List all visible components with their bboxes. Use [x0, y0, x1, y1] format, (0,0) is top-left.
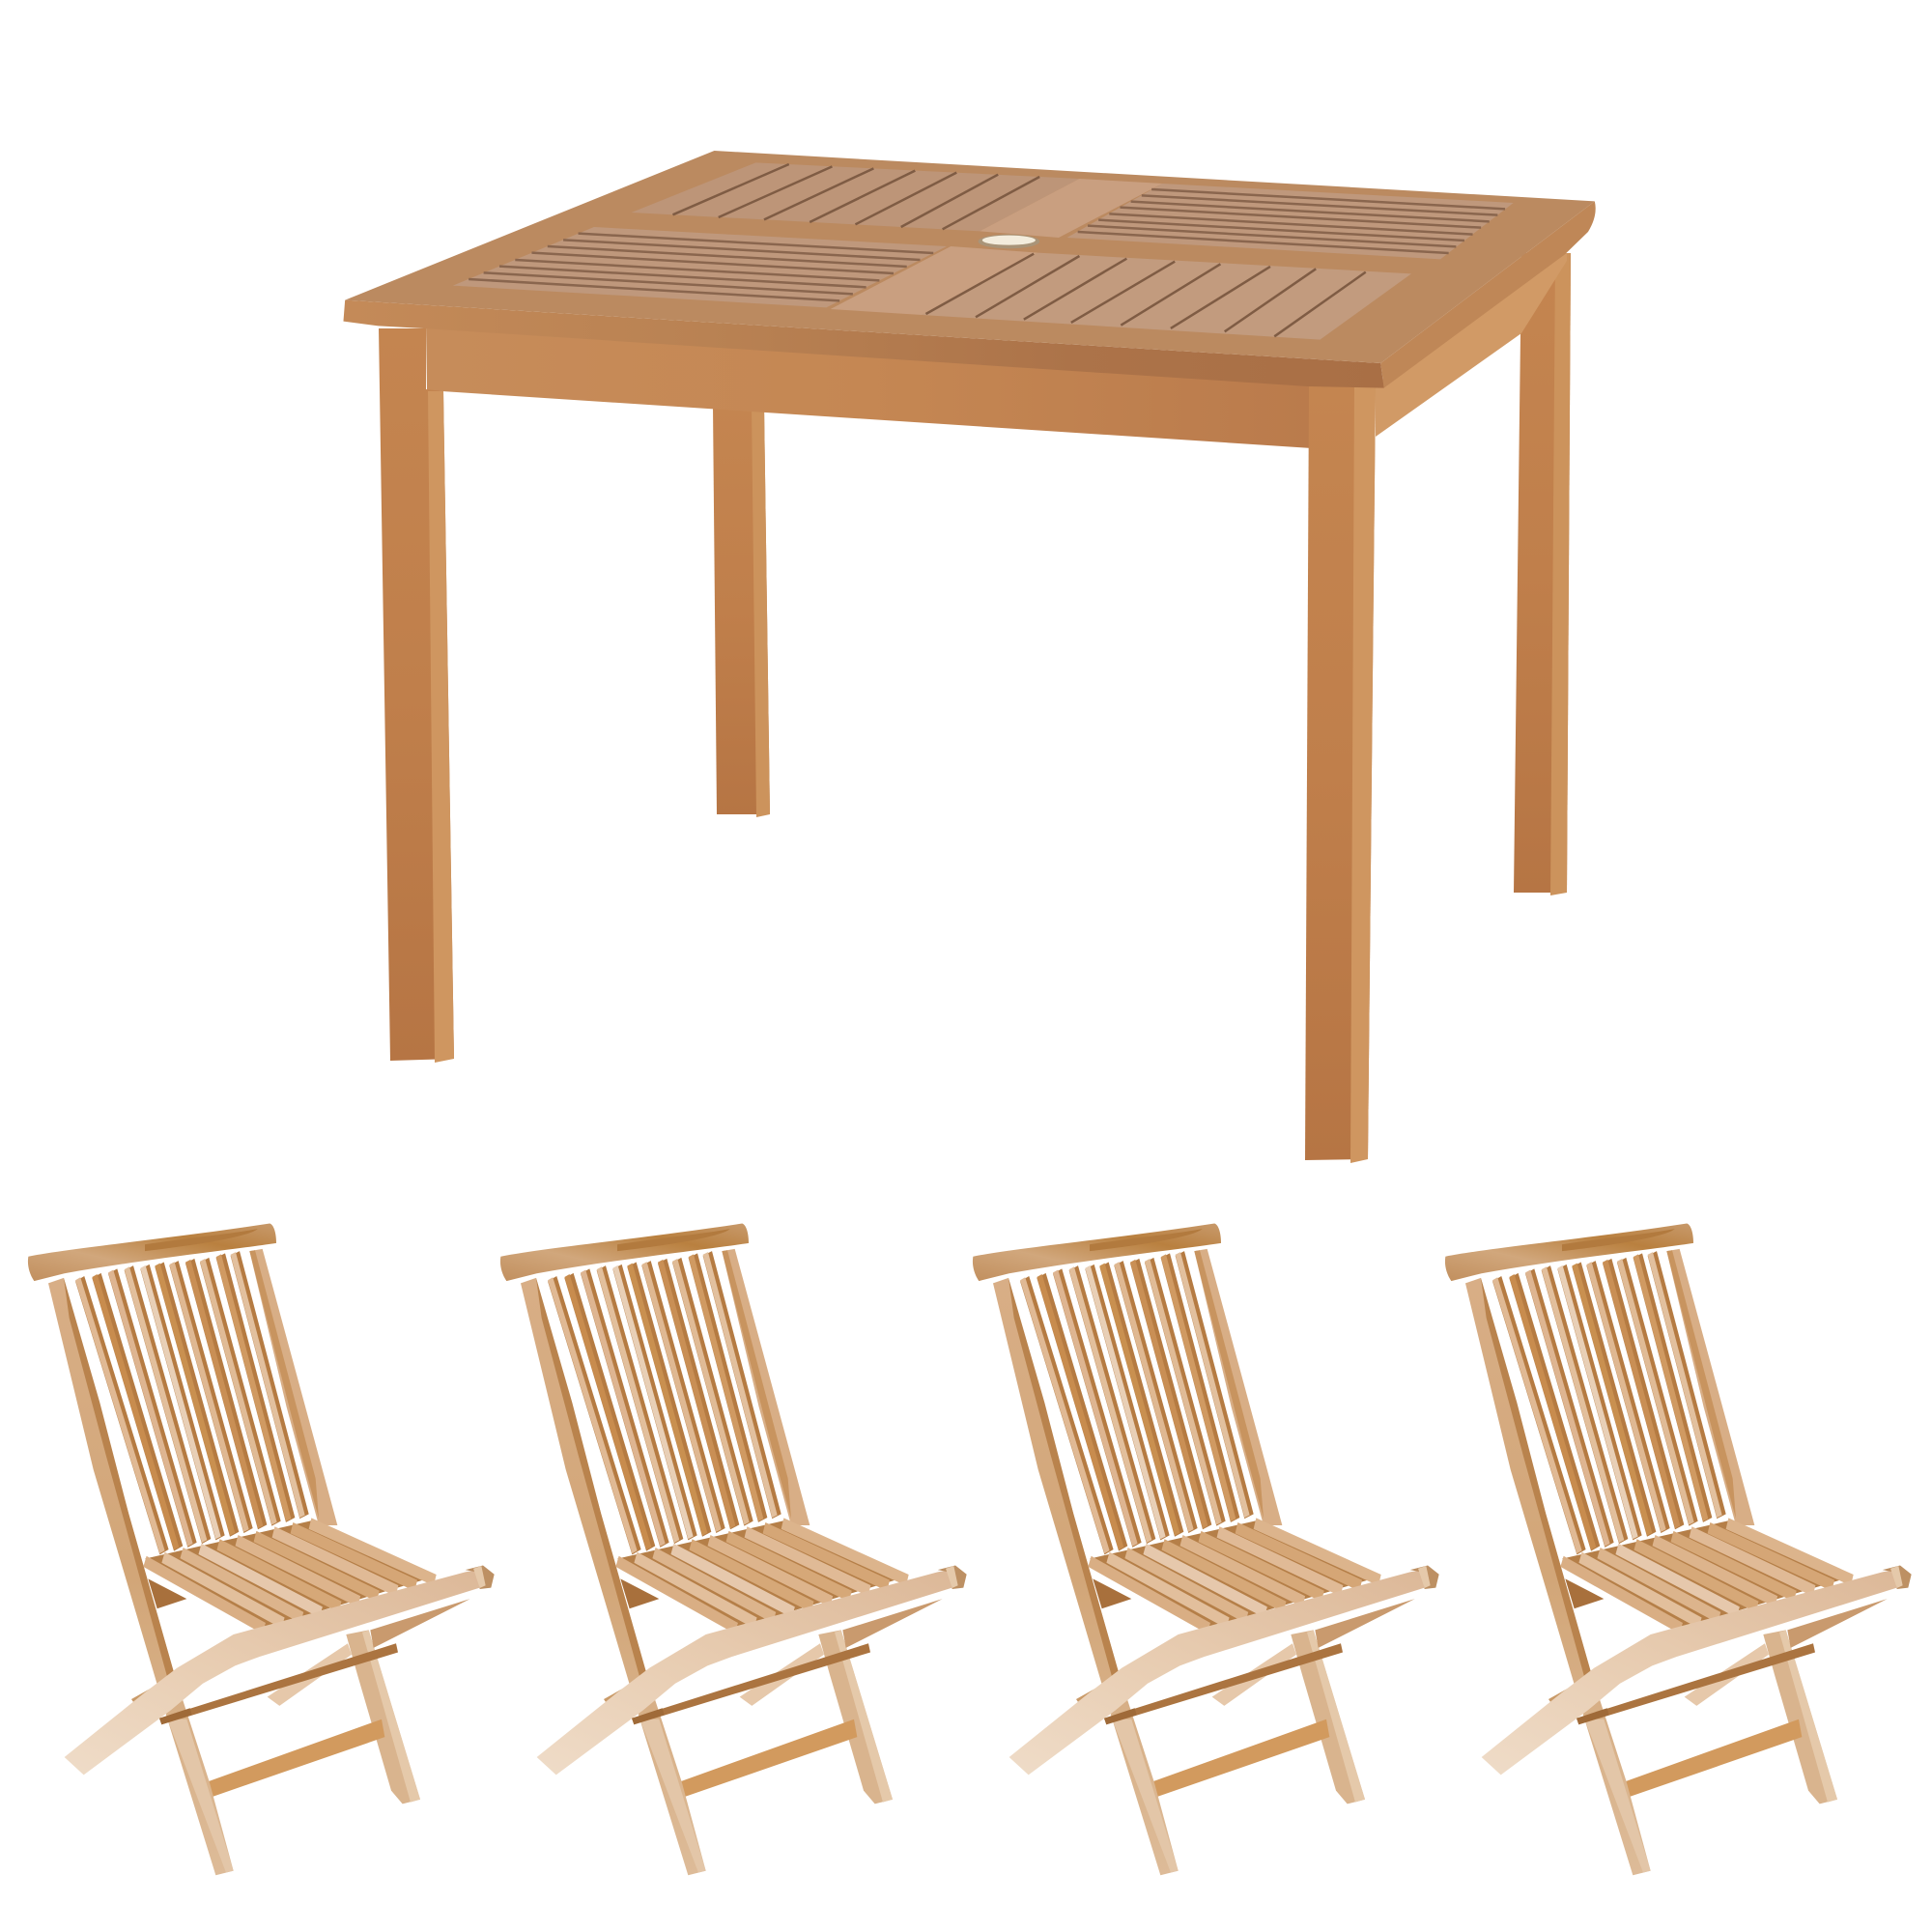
front apron [426, 325, 1312, 448]
back right leg [1514, 253, 1571, 895]
chair 4 [1445, 1224, 1912, 1875]
back left leg [713, 406, 770, 817]
top right edge [1380, 201, 1596, 388]
chair 2 [500, 1224, 967, 1875]
chair 1 [28, 1224, 495, 1875]
table [343, 151, 1596, 1163]
panel: back slats [632, 162, 1162, 238]
front right leg [1305, 384, 1376, 1163]
top surface [345, 151, 1595, 363]
front left leg [379, 328, 454, 1063]
top front edge [343, 300, 1384, 388]
parasol hole [979, 235, 1039, 248]
right apron [1376, 253, 1567, 437]
panel: left slats [453, 227, 947, 307]
panel: right slats [1067, 184, 1514, 259]
chair 3 [973, 1224, 1439, 1875]
table top [343, 151, 1596, 388]
panel: front slats [831, 246, 1411, 340]
